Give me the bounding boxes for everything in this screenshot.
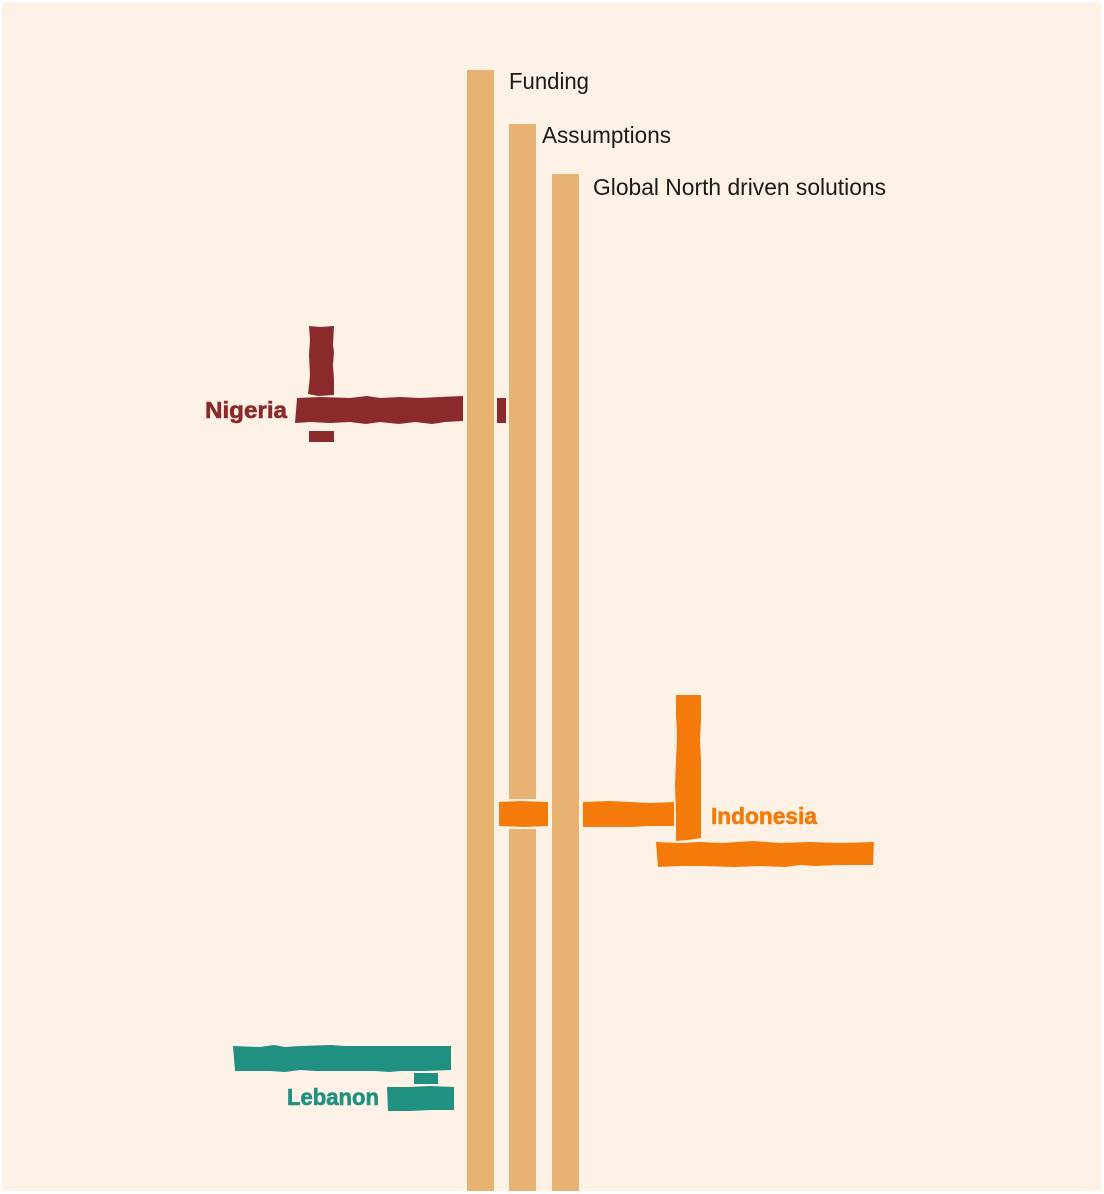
Indonesia small block [499, 801, 548, 827]
Lebanon long strip [233, 1045, 451, 1072]
Nigeria lower block [309, 431, 334, 442]
Nigeria vertical strip [308, 326, 334, 396]
label: global north driven solutions: Global North driven solutions [593, 174, 886, 200]
Lebanon block [387, 1086, 454, 1111]
vertical bars: themes [467, 70, 579, 1191]
group: Nigeria [205, 326, 506, 442]
bar: assumptions [509, 124, 536, 1191]
Lebanon label: Lebanon [287, 1084, 379, 1110]
Indonesia vertical strip [675, 695, 701, 841]
bar: funding [467, 70, 494, 1191]
Nigeria label: Nigeria [205, 397, 287, 423]
Indonesia label: Indonesia [711, 803, 817, 829]
label: assumptions: Assumptions [542, 122, 671, 148]
Nigeria right block [497, 398, 506, 423]
Lebanon small block [414, 1073, 438, 1084]
bar: global north driven solutions [552, 174, 579, 1191]
group: Indonesia [499, 695, 874, 867]
label: funding: Funding [509, 68, 589, 94]
Nigeria horizontal strip [295, 396, 463, 424]
Indonesia long strip [656, 841, 874, 867]
group: Lebanon [233, 1045, 454, 1111]
Indonesia horizontal strip [583, 801, 674, 827]
